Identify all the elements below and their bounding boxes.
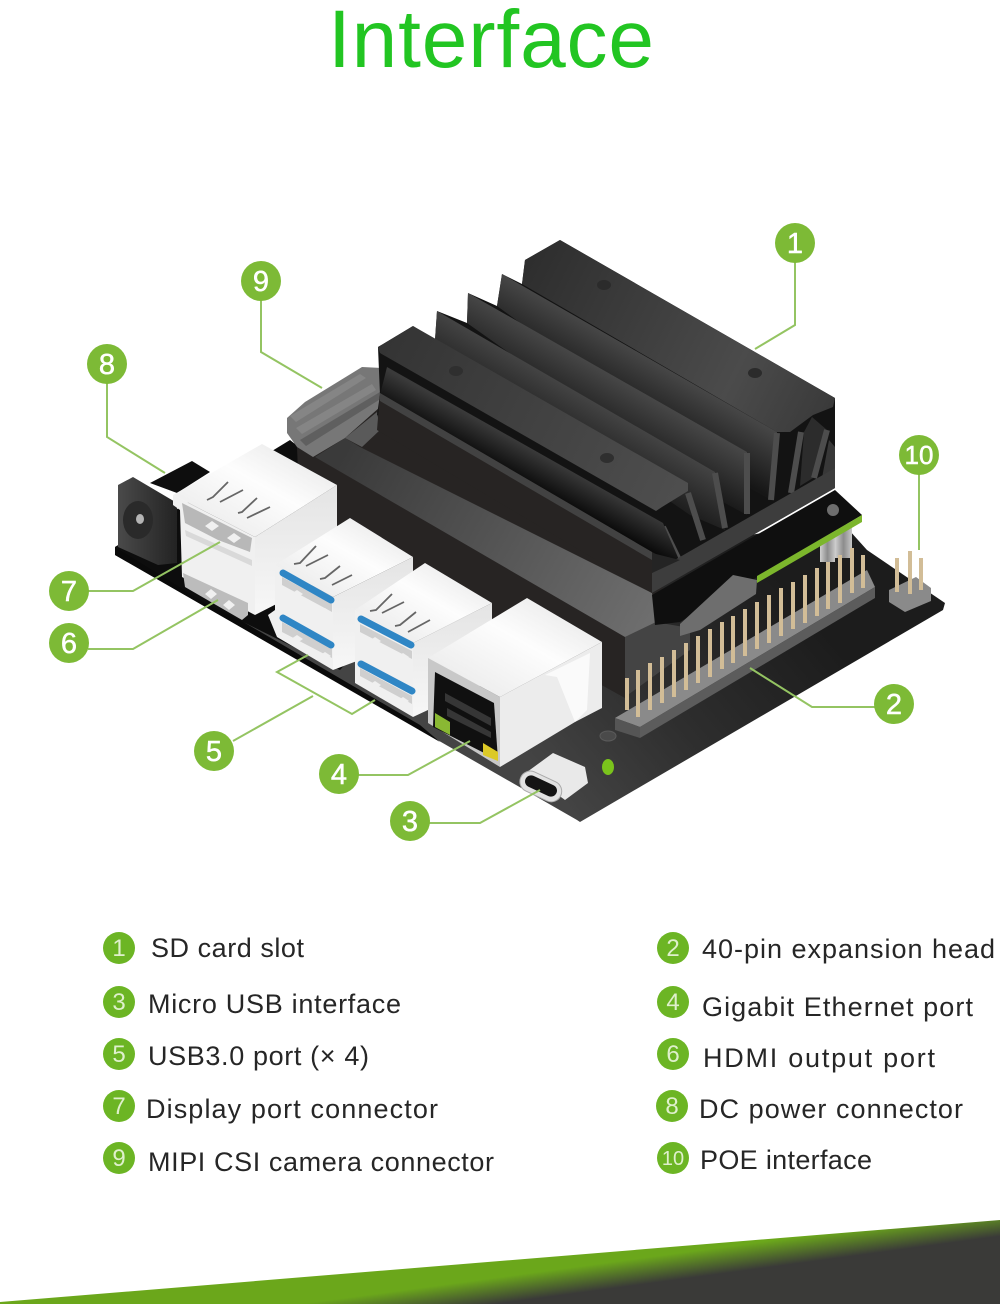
fin 3 bbox=[467, 293, 747, 515]
rear fin plate bbox=[522, 240, 835, 432]
carrier block bbox=[297, 400, 690, 698]
rear side fin ends bbox=[800, 417, 827, 486]
callout 7 bbox=[49, 542, 220, 611]
capacitors bbox=[820, 528, 835, 562]
legend item 2: 40-pin expansion head bbox=[702, 934, 995, 964]
footer wedge bbox=[0, 1220, 1000, 1304]
legend item 10: 10 bbox=[662, 1148, 684, 1170]
legend item 1: 1 bbox=[112, 935, 126, 962]
legend item 4: Gigabit Ethernet port bbox=[702, 992, 973, 1022]
POE header bbox=[889, 551, 931, 612]
fin 4 bbox=[435, 311, 725, 530]
legend item 10: POE interface bbox=[700, 1145, 872, 1175]
heat sink bbox=[377, 240, 835, 593]
USB 3.0 block A bbox=[268, 518, 413, 670]
legend item 8: DC power connector bbox=[699, 1094, 963, 1124]
heat sink base edge bbox=[652, 468, 835, 593]
heat sink silhouette bbox=[377, 240, 835, 593]
callout 3 bbox=[390, 790, 540, 841]
board illustration bbox=[115, 240, 945, 822]
front fin plate bbox=[378, 326, 688, 511]
legend item 4: 4 bbox=[666, 989, 680, 1016]
legend item 7: 7 bbox=[112, 1093, 126, 1120]
callout 3: 3 bbox=[402, 806, 418, 838]
Jetson module edge bbox=[652, 490, 862, 636]
callout 6 bbox=[49, 600, 218, 663]
DC power jack bbox=[118, 461, 210, 565]
40-pin expansion header bbox=[615, 548, 875, 738]
legend item 1: SD card slot bbox=[151, 933, 304, 963]
legend item 7: Display port connector bbox=[146, 1094, 438, 1124]
HDMI and display port block bbox=[173, 444, 337, 620]
legend item 2: 2 bbox=[666, 935, 680, 962]
callout 10 bbox=[899, 435, 939, 550]
callout 6: 6 bbox=[61, 628, 77, 660]
legend item 3: 3 bbox=[112, 989, 126, 1016]
lower fin 2 bbox=[377, 393, 677, 593]
lower fin 1 bbox=[380, 367, 680, 562]
legend item 9: 9 bbox=[112, 1145, 126, 1172]
callout 10: 10 bbox=[905, 440, 933, 470]
camera connector bbox=[287, 367, 400, 457]
callout 2 bbox=[750, 668, 914, 724]
callout 8 bbox=[87, 344, 165, 473]
callout 4: 4 bbox=[331, 759, 347, 791]
legend item 3: Micro USB interface bbox=[148, 989, 401, 1019]
callout 9: 9 bbox=[253, 266, 269, 298]
callout 1 bbox=[755, 223, 815, 349]
legend item 8: 8 bbox=[665, 1093, 679, 1120]
fin 2 bbox=[497, 274, 777, 500]
module board bbox=[652, 490, 862, 625]
circuit board bbox=[115, 440, 945, 822]
legend item 9: MIPI CSI camera connector bbox=[148, 1147, 494, 1177]
legend item 6: HDMI output port bbox=[703, 1043, 935, 1073]
callout 5: 5 bbox=[206, 736, 222, 768]
callout 8: 8 bbox=[99, 349, 115, 381]
callout 9 bbox=[241, 261, 322, 388]
legend item 5: 5 bbox=[112, 1041, 126, 1068]
callout 5 bbox=[194, 655, 375, 771]
module latch bbox=[680, 575, 757, 636]
micro USB connector bbox=[516, 753, 588, 805]
legend item 6: 6 bbox=[666, 1041, 680, 1068]
callout 1: 1 bbox=[787, 228, 803, 260]
USB 3.0 block B bbox=[355, 563, 492, 717]
legend item 5: USB3.0 port (× 4) bbox=[148, 1041, 369, 1071]
callout 4 bbox=[319, 741, 470, 794]
legend bbox=[103, 932, 995, 1177]
fin end edges bbox=[663, 430, 827, 562]
callout 2: 2 bbox=[886, 689, 902, 721]
callout 7: 7 bbox=[61, 576, 77, 608]
Gigabit Ethernet jack bbox=[428, 598, 602, 767]
